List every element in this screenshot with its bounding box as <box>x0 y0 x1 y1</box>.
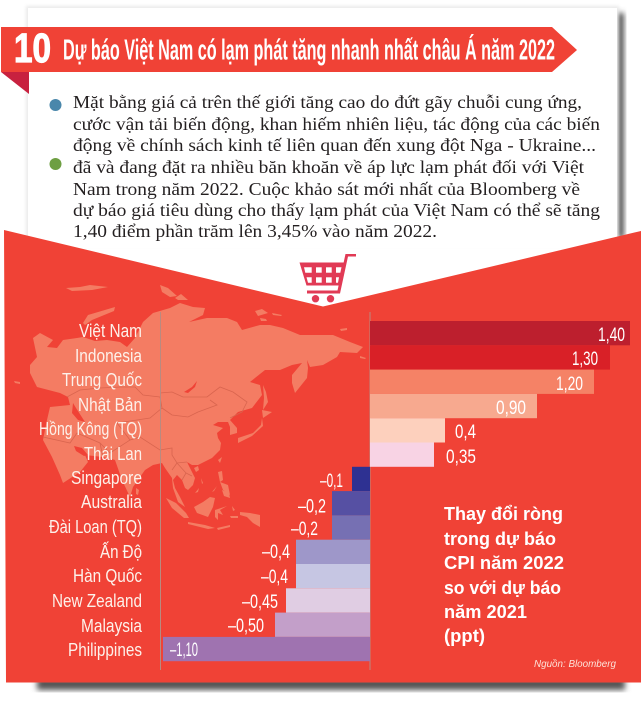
country labels <box>39 320 143 660</box>
panel: red chart background <box>4 230 641 682</box>
icon: blue bullet <box>50 99 62 111</box>
country labels: Indonesia <box>75 345 143 366</box>
text block: body: Mặt bằng giá cả trên thế giới tăng cao do đứt gãy chuỗi cung ứng, <box>73 92 582 112</box>
country labels: Hồng Kông (TQ) <box>39 418 142 439</box>
callout: chart caption: so với dự báo <box>444 578 561 598</box>
text block: body: đã và đang đặt ra nhiều băn khoăn về áp lực lạm phát đối với Việt <box>73 157 584 177</box>
bar values: 1,40 <box>598 324 625 346</box>
callout: chart caption: CPI năm 2022 <box>444 553 564 573</box>
bar values: –0,2 <box>291 518 318 540</box>
country labels: Đài Loan (TQ) <box>49 516 142 537</box>
icon: green bullet <box>50 158 62 170</box>
text block: body: cước vận tải biến động, khan hiếm nhiên liệu, tác động của các biến <box>73 114 600 134</box>
bar values: –0,45 <box>242 591 278 613</box>
callout: chart caption <box>444 504 564 646</box>
bar values: –0,4 <box>261 566 288 588</box>
text block: body <box>73 92 600 241</box>
callout: chart caption: (ppt) <box>444 626 485 646</box>
country labels: Australia <box>81 491 143 512</box>
callout: chart caption: năm 2021 <box>444 602 527 622</box>
text block: body: động về chính sách kinh tế liên quan đến xung đột Nga - Ukraine... <box>73 135 596 155</box>
country labels: Malaysia <box>81 615 143 636</box>
panel: white text card <box>28 8 617 248</box>
country labels: Nhật Bản <box>78 394 142 415</box>
country labels: Việt Nam <box>79 320 142 341</box>
country labels: Hàn Quốc <box>73 565 142 586</box>
bar values: 1,30 <box>572 348 598 370</box>
map: Asia <box>14 285 366 530</box>
bar values <box>170 324 625 661</box>
number badge: 10 <box>14 25 51 71</box>
text block: body: dự báo giá tiêu dùng cho thấy lạm phát của Việt Nam có thể sẽ tăng <box>73 200 600 220</box>
bar values: –0,2 <box>298 496 326 518</box>
country labels: Philippines <box>68 639 142 660</box>
bar values: –0,1 <box>320 470 343 492</box>
icon: shopping cart <box>300 254 356 302</box>
text block: body: Nam trong năm 2022. Cuộc khảo sát mới nhất của Bloomberg về <box>73 179 580 199</box>
bar values: –0,50 <box>228 615 264 637</box>
bar chart <box>163 321 630 661</box>
country labels: Singapore <box>71 467 142 488</box>
country labels: Trung Quốc <box>62 369 142 390</box>
callout: chart caption: trong dự báo <box>444 529 556 549</box>
country labels: Ấn Độ <box>100 541 142 562</box>
country borders <box>43 387 247 480</box>
inner seas <box>72 403 85 422</box>
text block: body: 1,40 điểm phần trăm lên 3,45% vào năm 2022. <box>73 221 437 241</box>
country labels: New Zealand <box>52 590 142 611</box>
source note: Nguồn: Bloomberg <box>534 658 616 670</box>
bar values: –1,10 <box>170 639 198 661</box>
bar values: 1,20 <box>556 373 583 395</box>
bar values: 0,4 <box>455 421 476 443</box>
axis lines <box>160 312 370 670</box>
bar values: –0,4 <box>262 541 290 563</box>
bar values: 0,35 <box>446 446 476 468</box>
callout: chart caption: Thay đổi ròng <box>444 504 563 524</box>
country labels: Thái Lan <box>84 443 142 464</box>
header ribbon <box>1 25 577 94</box>
bar values: 0,90 <box>496 397 526 419</box>
